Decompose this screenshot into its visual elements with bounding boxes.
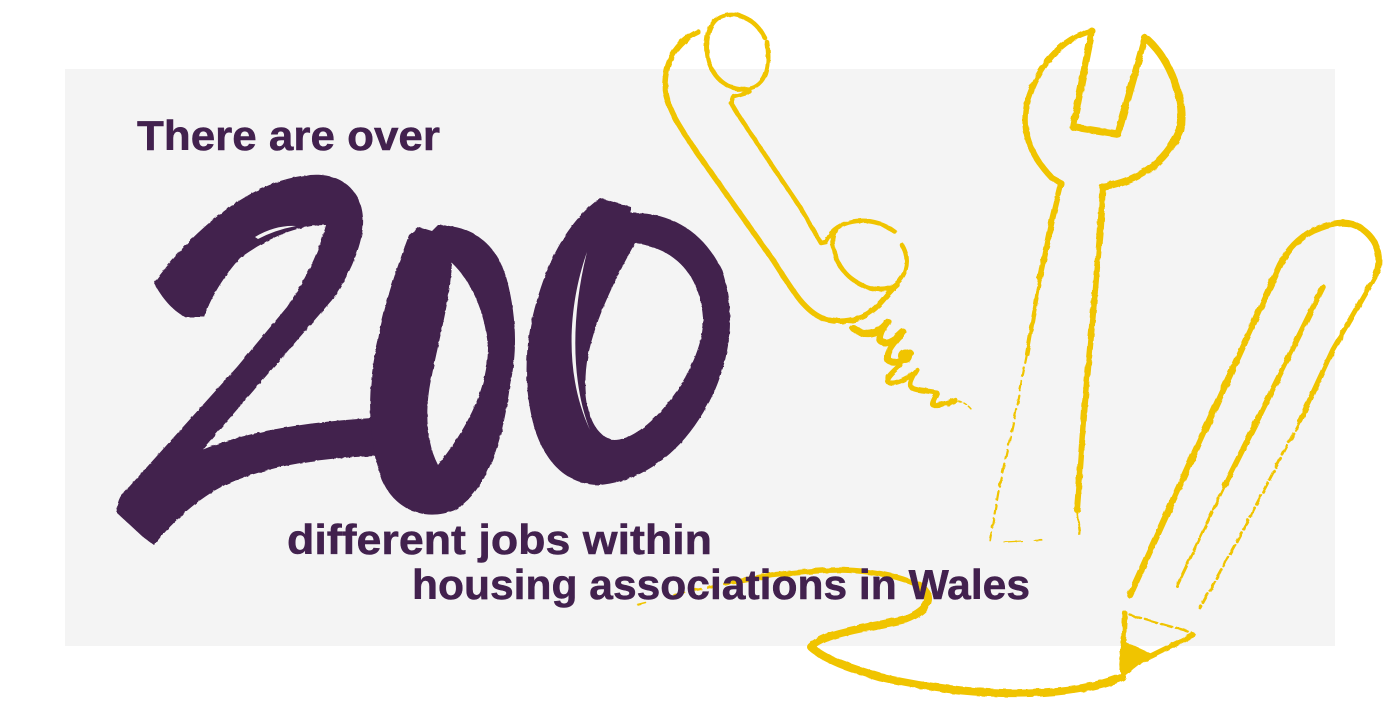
scribble line: [811, 585, 1122, 693]
brush highlights on numerals: [210, 226, 695, 503]
caption: second line: housing associations in Wales: [412, 561, 1030, 608]
panel: grey background: [65, 69, 1335, 646]
pencil centre line: [1225, 287, 1323, 485]
big number 200: [117, 175, 730, 545]
icon: telephone handset: [665, 15, 972, 410]
numeral first 0: [370, 225, 515, 515]
icon: pencil with scribble line: [638, 223, 1379, 693]
pencil tip: [1122, 613, 1193, 670]
pencil right edge: [1300, 275, 1376, 421]
numeral 2: [117, 175, 376, 545]
heading: intro text: There are over: [137, 112, 440, 159]
icon: spanner: [990, 31, 1181, 542]
pencil body: [1130, 223, 1379, 595]
numeral second 0: [527, 198, 730, 485]
caption: first line: different jobs within: [287, 516, 712, 563]
